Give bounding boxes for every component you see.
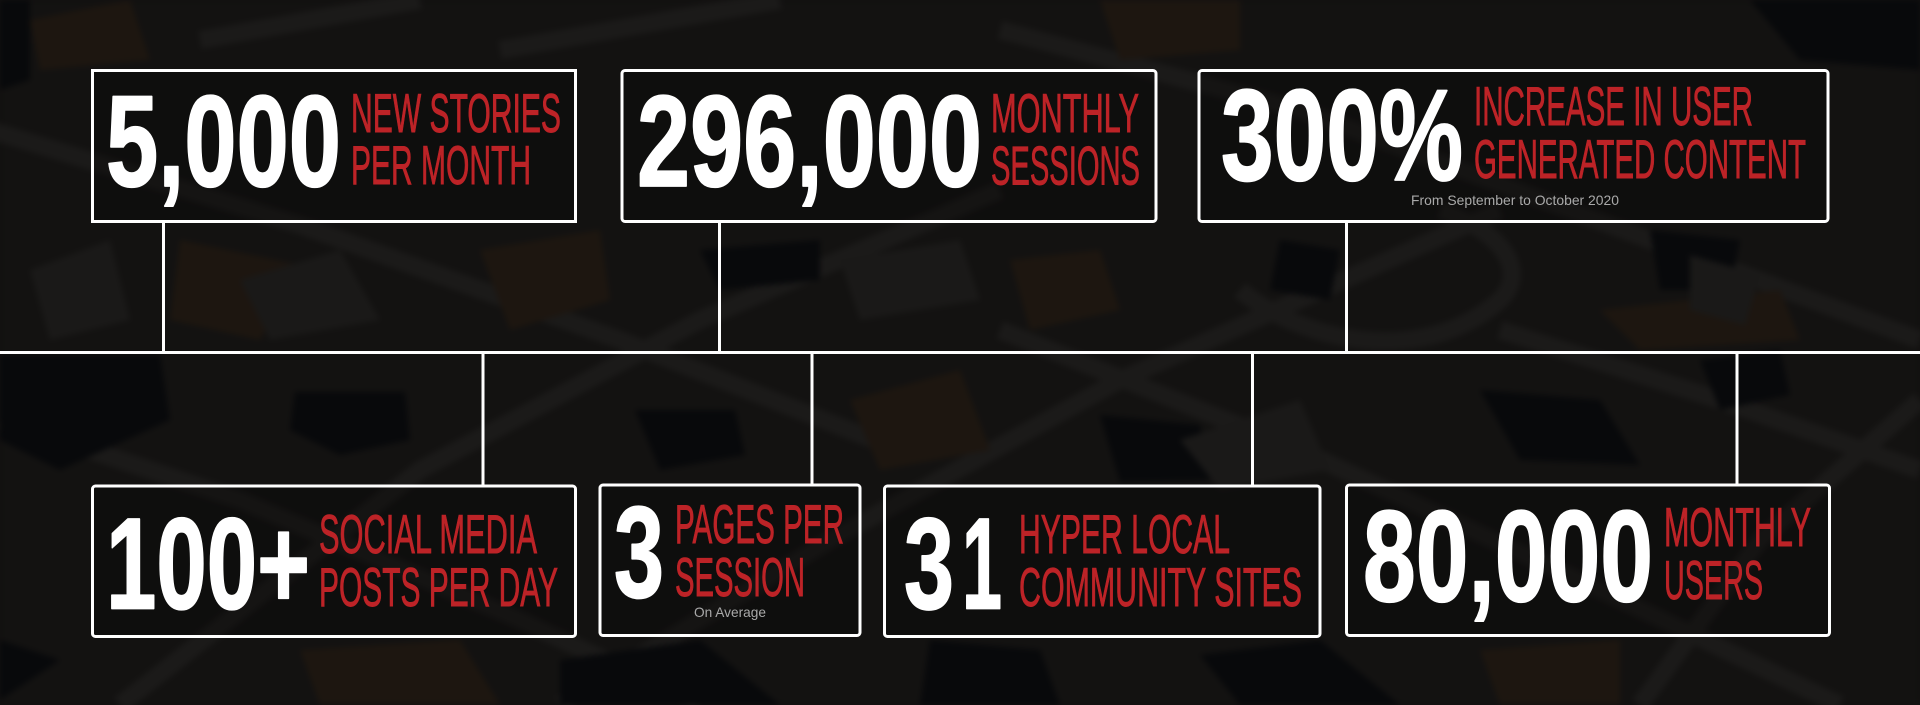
stat label: SESSION bbox=[675, 546, 805, 608]
footnote: From September to October 2020 bbox=[1411, 192, 1619, 208]
stat label: POSTS PER DAY bbox=[319, 556, 558, 618]
stat number: 80,000 bbox=[1363, 483, 1653, 629]
stat label bbox=[351, 82, 561, 196]
stat label bbox=[1664, 496, 1811, 611]
stat label bbox=[1474, 75, 1806, 190]
panel: 300% increase in user generated content bbox=[1199, 62, 1828, 222]
stat label bbox=[675, 493, 844, 608]
stat label: HYPER LOCAL bbox=[1019, 503, 1230, 565]
stat label bbox=[991, 82, 1140, 196]
stat number: 3 bbox=[614, 479, 664, 625]
stat label: SESSIONS bbox=[991, 134, 1140, 196]
stat number: 100+ bbox=[106, 490, 310, 636]
panel: 31 hyper local community sites bbox=[884, 486, 1320, 636]
connector lines linking the stat boxes bbox=[0, 222, 1920, 486]
stat label: SOCIAL MEDIA bbox=[319, 503, 537, 565]
stat number: 3 bbox=[904, 490, 954, 636]
stat number: 5,000 bbox=[106, 68, 341, 214]
footnote: On Average bbox=[694, 604, 766, 620]
stat label: MONTHLY bbox=[991, 82, 1139, 144]
panel: 100+ social media posts bbox=[92, 486, 576, 636]
stat label: COMMUNITY SITES bbox=[1019, 556, 1302, 618]
panel: 3 pages per session bbox=[600, 479, 860, 636]
stat label bbox=[1019, 503, 1302, 618]
stat number: 1 bbox=[962, 490, 1002, 636]
stat label bbox=[319, 503, 558, 618]
panel: 5,000 new stories bbox=[92, 68, 576, 222]
stat number: 296,000 bbox=[637, 68, 982, 214]
panel: 296,000 monthly sessions bbox=[622, 68, 1156, 222]
stat label: USERS bbox=[1664, 549, 1763, 611]
panel: 80,000 monthly users bbox=[1346, 483, 1830, 636]
stat number: 300% bbox=[1221, 62, 1463, 208]
stat label: NEW STORIES bbox=[351, 82, 561, 144]
stat label: PAGES PER bbox=[675, 493, 844, 555]
stat label: PER MONTH bbox=[351, 134, 531, 196]
